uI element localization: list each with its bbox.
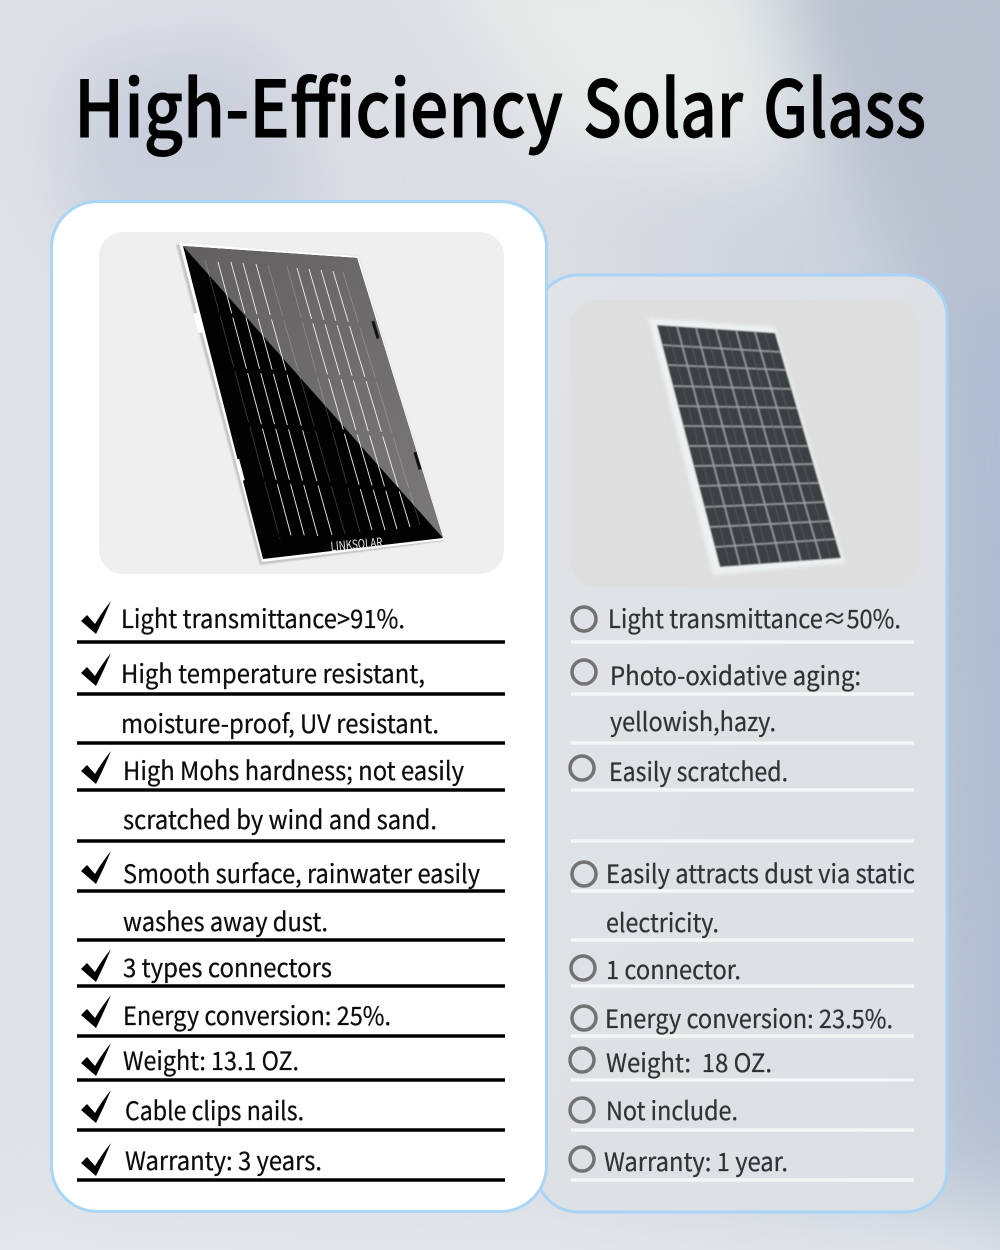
high-efficiency features [121,599,480,1178]
conventional features: Light transmittance≈50%. [608,599,901,636]
conventional solar panel [648,318,845,575]
title: Solar [583,48,744,160]
conventional features: yellowish,hazy. [610,702,776,739]
high-efficiency features: High Mohs hardness; not easily [123,751,464,788]
conventional features: Warranty: 1 year. [604,1142,788,1179]
conventional features: Energy conversion: 23.5%. [605,999,893,1036]
conventional features: Weight: 18 OZ. [606,1043,772,1080]
high-efficiency features: scratched by wind and sand. [123,800,437,837]
high-efficiency features: Smooth surface, rainwater easily [123,854,480,891]
conventional bullets [570,607,596,1171]
conventional features: 1 connector. [606,950,741,987]
high-efficiency features: Energy conversion: 25%. [123,996,391,1033]
title [74,48,926,160]
title: Glass [763,48,926,160]
panel: high-efficiency glass [52,202,546,1212]
high-efficiency features: washes away dust. [123,902,328,939]
conventional features: Easily scratched. [609,752,788,789]
conventional features: Easily attracts dust via static [606,854,915,891]
high-efficiency features: Warranty: 3 years. [125,1141,322,1178]
image tile: blurred panel [571,300,919,587]
high-efficiency features: Cable clips nails. [125,1091,304,1128]
logo: LINKSOLAR [330,532,383,555]
high-efficiency check marks [81,601,111,1176]
high-efficiency features: High temperature resistant, [121,654,425,691]
high-efficiency features: Weight: 13.1 OZ. [123,1041,299,1078]
conventional features: electricity. [606,903,719,940]
solar panel glass [183,246,443,559]
high-efficiency features: Light transmittance>91%. [121,599,405,636]
panel: conventional glass [536,275,947,1212]
conventional features: Not include. [606,1091,738,1128]
conventional separators [571,642,914,1180]
image tile: LinkSolar panel [99,232,504,574]
high-efficiency separators [77,642,505,1180]
frame clips [193,313,422,481]
high-efficiency features: 3 types connectors [123,948,332,985]
solar panel frame [176,244,444,565]
title: High-Efficiency [74,48,563,160]
high-efficiency features: moisture-proof, UV resistant. [121,704,439,741]
conventional features: Photo-oxidative aging: [610,656,861,693]
conventional features [604,599,915,1179]
